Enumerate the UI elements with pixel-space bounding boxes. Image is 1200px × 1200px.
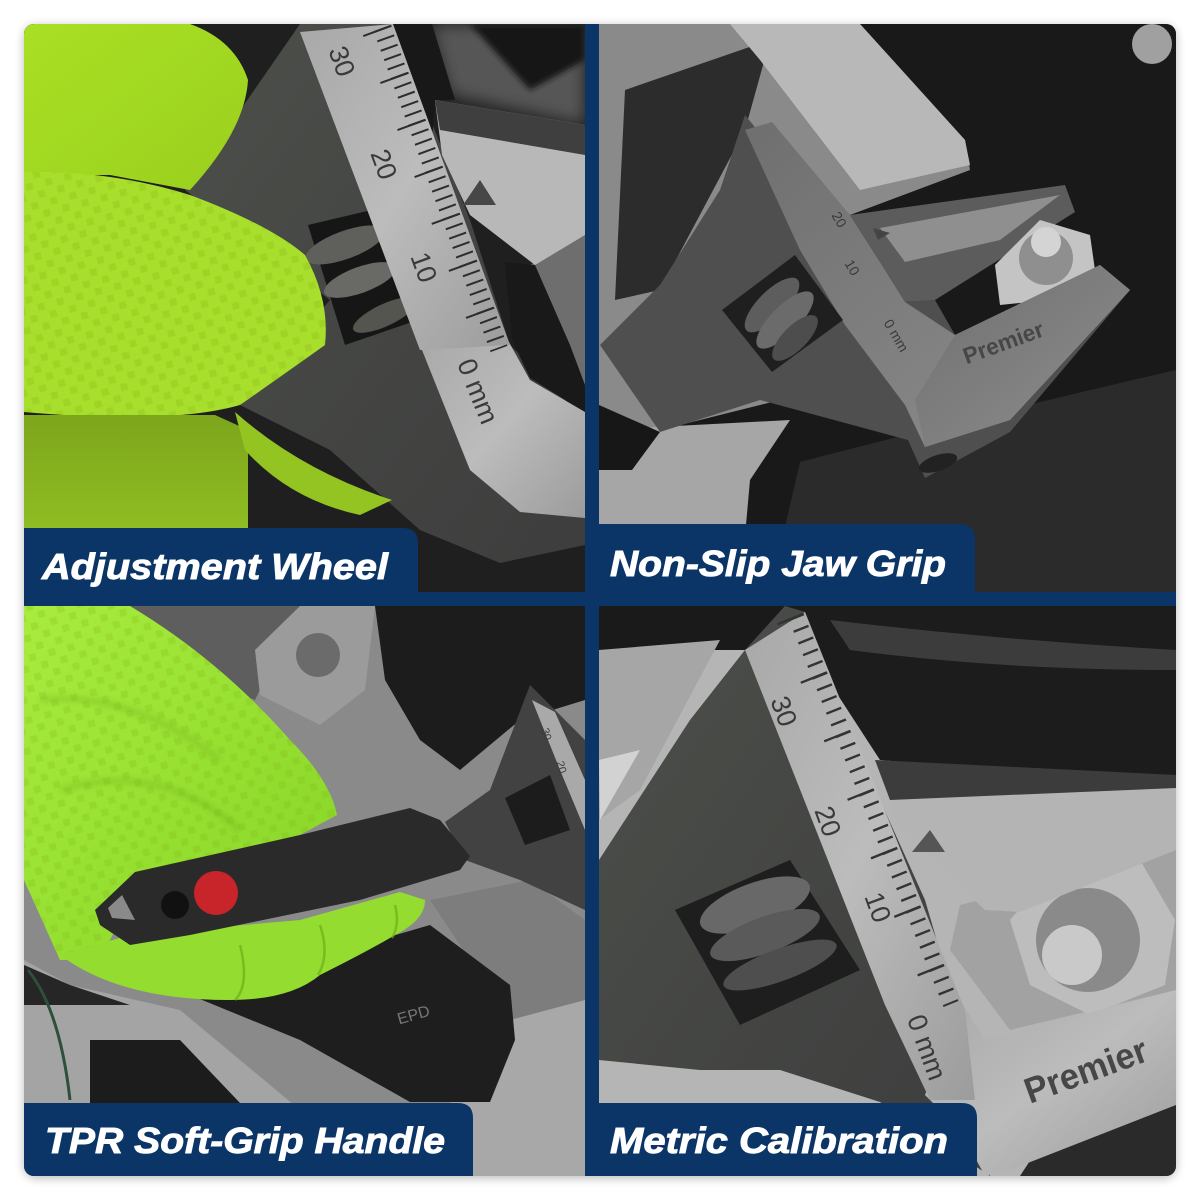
label: non-slip jaw grip: Non-Slip Jaw Grip [610,543,946,584]
wrench: 20 [829,209,850,230]
wrench: 10 [859,888,897,927]
scale ticks [790,616,951,1006]
wrench head: 20 [554,760,568,775]
adjustment wheel [722,255,843,372]
wrench [599,606,1176,1176]
green glove [24,24,392,528]
movable jaw [850,185,1075,302]
label: tpr soft-grip handle [24,1103,473,1176]
wrench: Premier [1019,1029,1153,1111]
lower steel jaw [420,335,585,518]
wrench [599,115,1130,478]
panel: tpr soft-grip handle: EPD [396,1003,432,1028]
metric scale [745,612,975,1100]
panel: non-slip jaw grip [599,24,1176,592]
panel: adjustment wheel [24,24,585,592]
wire [28,970,70,1100]
wrench: 10 [842,257,863,278]
lower steel jaw [925,1078,1176,1175]
wrench: 0 mm [901,1011,952,1084]
black handle with red button [95,808,470,945]
wrench: 20 [809,802,847,841]
label: non-slip jaw grip [585,524,975,592]
wrench body: 20 [365,145,403,184]
wrench body [185,24,585,563]
wrench body: 0 mm [451,354,504,428]
metric scale strip [300,24,510,350]
wrench: Premier [959,316,1047,369]
oil filter cylinder [190,925,515,1102]
panel: metric calibration [599,606,1176,1176]
movable jaw [435,100,585,265]
label: adjustment wheel [24,528,418,592]
wrench body: 30 [323,42,361,81]
movable jaw [976,850,1174,912]
wrench head [445,685,585,910]
label: adjustment wheel: Adjustment Wheel [41,546,389,587]
hex nut and bolt [995,220,1095,305]
fixed jaw [915,265,1130,447]
label: metric calibration [585,1103,977,1176]
wrench head: 30 [539,727,553,742]
adjustment wheel knurl [306,226,407,333]
handle [599,405,660,470]
wrench: 30 [765,692,803,731]
hex nut [1010,860,1175,1015]
wrench body: 10 [405,248,443,287]
panel: tpr soft-grip handle [24,606,585,1176]
label: tpr soft-grip handle: TPR Soft-Grip Handle [45,1120,445,1161]
adjustment wheel [675,860,860,1025]
label: metric calibration: Metric Calibration [610,1120,948,1161]
green glove hand [24,606,425,1000]
scale ticks [377,28,499,351]
wrench: 0 mm [881,316,912,355]
